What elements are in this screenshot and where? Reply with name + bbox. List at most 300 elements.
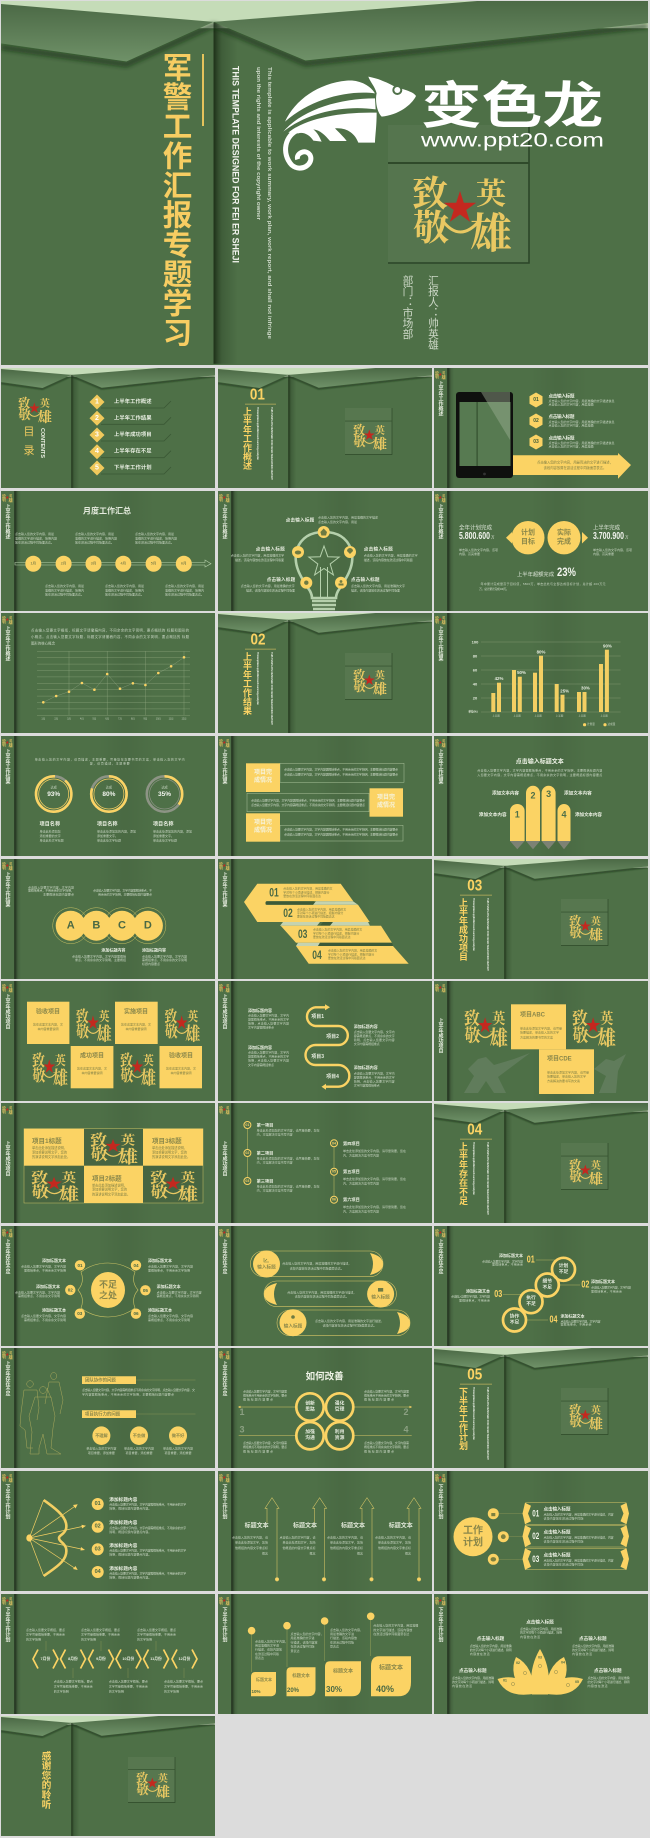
bar 10 percent: 标题文本	[256, 1676, 272, 1682]
ring labels: 协作	[510, 1312, 519, 1320]
project 4: 单击此处添加您的文字内容，请尽量简要，您在	[343, 1148, 406, 1153]
section number: 05	[467, 1366, 482, 1384]
reason 1: 单击输入您的文字内容	[86, 1446, 116, 1451]
plan figure: 5.800.600	[459, 531, 490, 542]
panel: shortcomings	[1, 1226, 215, 1346]
bar 20 percent: 用最准确的文字进	[290, 1635, 315, 1640]
labels left: 需概括重点，不用余余文字简明	[24, 1317, 66, 1322]
item 4: 04	[95, 1569, 102, 1575]
project 3: 内，方案解决方案书写内容	[257, 1188, 293, 1193]
panel: project ABC CDE	[434, 981, 648, 1101]
intro	[477, 767, 602, 777]
card: project ABC: 简要描述，单击输入您的文字	[520, 1030, 559, 1035]
divider 2-3	[280, 922, 370, 926]
logo card	[345, 653, 392, 700]
notes: 点击输入您要文字内容，文字内容需	[364, 1388, 409, 1393]
badge: 敬	[18, 405, 31, 423]
bar values: 50%	[517, 670, 526, 675]
actual figure: 3.700.900	[593, 531, 624, 542]
sidebar title: 上半年工作概述	[4, 503, 10, 540]
panel: completion boxes	[218, 736, 432, 856]
badge 3: 致	[32, 1048, 45, 1071]
note 4: 单击此处添加文字，您简	[378, 1540, 411, 1545]
sidebar badge: 致	[219, 861, 223, 867]
card: project ABC	[511, 1004, 566, 1049]
sidebar badge: 英	[9, 1228, 13, 1233]
intro text	[31, 628, 190, 646]
sidebar badge: 敬	[435, 742, 439, 748]
label left: 点击输入标题	[477, 1635, 505, 1642]
labels right: 点击输入您要文字内容，文字内容	[148, 1263, 193, 1268]
folded collar header	[1, 1716, 215, 1836]
labels right: 需概括重点，不用余余文字简明	[157, 1293, 199, 1298]
plan figure: 内容，高亮重要	[459, 551, 480, 556]
banner numbers: 01	[269, 886, 279, 900]
card: project 2: 的演讲说明文字添加此处。	[92, 1191, 130, 1196]
badge left	[464, 1005, 508, 1052]
label far left: 点击输入您的文字内容，用最准确	[452, 1675, 494, 1680]
upper notes: 准确的文字进行描述，简明内容	[75, 535, 117, 540]
sidebar title: 上半年成功项目	[4, 1140, 10, 1177]
sidebar badge: 雄	[8, 1600, 13, 1607]
sidebar badge	[219, 983, 230, 994]
upper notes: 点击输入您的文字内容，用最	[75, 531, 114, 536]
badge: 致	[18, 394, 31, 412]
upper notes: 点击输入您要文字内容，文字内容需概括重点，不	[93, 888, 152, 893]
pencil 3: 3	[546, 789, 551, 799]
note 2: 点击输入您要文字内容，文字内容	[591, 1285, 631, 1290]
badge bottom right	[150, 1166, 198, 1206]
actual badge	[548, 521, 588, 554]
badge bottom right: 英	[181, 1168, 196, 1186]
step labels: 项目4	[326, 1074, 339, 1080]
soldier silhouettes	[464, 1053, 626, 1093]
sidebar badge	[219, 1228, 230, 1239]
card: project 1: 单击此处添加描述说明，	[32, 1145, 67, 1150]
panel: section 04	[434, 1103, 648, 1223]
sidebar badge: 雄	[8, 1477, 13, 1484]
badge: 英	[375, 667, 385, 682]
list item 3: 上半年成功项目	[114, 430, 152, 438]
project 5: 单击此处添加您的文字内容，请尽量简要，您在	[343, 1176, 406, 1181]
hexagon 03: 03	[533, 439, 539, 445]
item 3: 添加标题内容	[109, 1542, 138, 1549]
reporter: 汇报人：帅英雄	[427, 274, 439, 351]
sidebar badge: 敬	[435, 1477, 439, 1483]
sidebar badge	[219, 1473, 230, 1484]
panel: section 01	[218, 368, 432, 488]
list item 3: 3	[95, 432, 99, 438]
sidebar badge: 英	[9, 983, 13, 988]
note 4: 点击输入您要文字内容，文字内容	[560, 1318, 600, 1323]
sidebar badge	[435, 493, 446, 504]
labels left: 需概括重点，不用余余文字简明	[18, 1293, 60, 1298]
intro text	[35, 756, 185, 766]
english description	[255, 67, 272, 339]
ring 80 percent	[91, 776, 127, 812]
banner 01: 点击输入您的文字内容，用最准确的文字进行描述，内容	[544, 1512, 614, 1516]
lower notes: 的文字简明	[109, 1688, 124, 1693]
banner notes: 点击输入您的文字内容，用最准确的文	[283, 886, 333, 891]
ring 35 percent	[147, 776, 182, 812]
step numbers: 02	[581, 1280, 590, 1290]
list item 5	[90, 460, 171, 476]
sidebar badge	[435, 615, 446, 626]
card: acceptance project 2: 验收项目	[169, 1052, 193, 1060]
note right: 点击输入您要文字内容，文字内容	[142, 954, 187, 959]
sidebar badge	[2, 1596, 13, 1607]
heading: contents english: CONTENTS	[39, 428, 45, 458]
label top: 点击输入您的文字内容，用最	[318, 519, 357, 524]
step numbers	[494, 1254, 590, 1326]
petal marks: 02	[516, 1661, 520, 1665]
upper notes	[15, 531, 177, 545]
badge: 敬	[569, 923, 582, 941]
actual badge: 实际	[557, 528, 571, 536]
project name 3	[153, 820, 192, 843]
sidebar badge: 敬	[219, 1232, 223, 1238]
numerals: 3	[239, 1425, 245, 1435]
notes: 概括重点不用余余的文字简明，要点	[243, 1444, 287, 1449]
reason 2: 项目重要，添加重要	[125, 1450, 153, 1455]
section description	[472, 1387, 490, 1460]
number nodes: 03	[77, 1311, 83, 1316]
bar 30 percent: 在激活过程中同版	[330, 1639, 354, 1644]
lower notes: 放在激活过程中同版面表达。	[105, 592, 144, 597]
sidebar badge: 敬	[2, 1232, 6, 1238]
sidebar title: 上半年存在不足	[4, 1360, 10, 1397]
sidebar badge	[2, 1228, 13, 1239]
bar 10 percent: 意表达	[255, 1655, 264, 1660]
left note bottom: 容需概括重点，不用余余的文字	[248, 1054, 289, 1059]
badge 2: 英	[187, 1007, 198, 1025]
left note top: 添加标题内容	[248, 1007, 272, 1013]
labels left	[15, 1257, 66, 1322]
sidebar badge: 致	[435, 1228, 439, 1234]
project 5	[330, 1168, 406, 1185]
badge bottom right: 致	[150, 1166, 167, 1188]
label far right: 的文字对每个小项进行描述，简明	[588, 1679, 630, 1684]
list item 2: 2	[95, 415, 99, 422]
sidebar badge: 敬	[219, 742, 223, 748]
left note top: 简明，点击输入您要文字内容	[248, 1020, 289, 1025]
reason 3: 做不好	[172, 1432, 185, 1439]
lower notes	[54, 1679, 203, 1693]
ring 35 percent: 35%	[158, 791, 171, 798]
ring labels: 计划	[559, 1262, 568, 1269]
petal marks: 01	[503, 1679, 507, 1683]
ring labels: 不足	[510, 1320, 519, 1326]
sidebar title: 上半年成功项目	[438, 1017, 444, 1054]
badge bottom right: 敬	[150, 1180, 168, 1201]
sidebar badge: 雄	[225, 1232, 230, 1239]
sidebar badge: 致	[219, 1473, 223, 1479]
icons on bulb	[292, 526, 356, 589]
card: successful project	[71, 1046, 113, 1088]
badge: salute heroes: 雄	[470, 201, 512, 261]
sidebar title: 上半年工作结果	[222, 871, 228, 908]
lower notes: 文字尽量概括重要，不用余余	[164, 1683, 203, 1688]
heading: contents	[24, 426, 34, 457]
card: project 2: 单击此处添加描述说明，	[92, 1182, 127, 1187]
circles: A	[67, 920, 75, 932]
sidebar badge: 英	[9, 493, 13, 498]
line chart: 9月	[144, 716, 147, 720]
closing title: 感谢您的聆听	[40, 1750, 51, 1810]
note 4	[375, 1535, 411, 1556]
sidebar badge: 英	[226, 1596, 230, 1601]
sidebar badge: 英	[9, 1350, 13, 1355]
sidebar badge: 雄	[8, 619, 13, 626]
card: project 2: 项目2标题	[92, 1174, 122, 1182]
label top	[286, 514, 378, 524]
right note bottom: 点击输入您要文字内容，文字内	[354, 1070, 395, 1075]
ring labels: 思路	[305, 1406, 315, 1412]
titles: 标题文本	[341, 1521, 365, 1529]
project 5: 第五项目	[343, 1168, 360, 1175]
notes: 概括标题内容要点	[243, 1397, 273, 1402]
right note bottom: 容需概括重点，不用余余的文字	[354, 1074, 395, 1079]
sidebar badge	[2, 1105, 13, 1116]
arrow 2	[313, 1498, 327, 1581]
ring 93 percent: 93%	[47, 791, 60, 798]
labels right: 添加标题文本	[148, 1257, 172, 1263]
card: project CDE: 项目CDE	[547, 1056, 572, 1063]
rings	[503, 1258, 575, 1332]
note 4: 他概括的内容文字重点标	[378, 1545, 411, 1550]
rule	[460, 894, 492, 896]
pill 1: 该段内容放在激活过程中同版面意表达。	[290, 1265, 344, 1270]
sidebar title: 上半年工作结果	[222, 748, 228, 785]
step labels	[311, 1014, 339, 1080]
note 3: 需概括重点，不用余余	[459, 1298, 490, 1303]
section description: THIS TEMPLATE DESIGNED FOR FEI ER SHEJI WORK REPORT	[486, 1387, 490, 1460]
sidebar badge	[435, 370, 446, 381]
card: project 1	[24, 1129, 84, 1166]
lower notes	[45, 583, 204, 597]
sidebar badge: 雄	[441, 619, 446, 626]
labels right: 点击输入您要文字内容，文字内容	[157, 1289, 202, 1294]
lower notes: 的文字简明	[54, 1688, 69, 1693]
arrow 3	[360, 1498, 374, 1581]
banner notes: 字对每个小项进行描述，把握内容分	[283, 889, 330, 894]
chevrons	[33, 1650, 197, 1668]
card: project ABC: 单击此处添加文字内容，请尽量	[520, 1025, 562, 1030]
circles: B	[92, 920, 100, 932]
badge	[353, 421, 387, 454]
lower notes: 准确的文字进行描述，简明内	[45, 587, 84, 592]
lower notes: 点击输入您要文字概括，要点	[164, 1679, 203, 1684]
labels left: 添加标题文本	[42, 1257, 66, 1263]
sidebar title: 下半年工作计划	[222, 1607, 228, 1642]
reason 2	[124, 1426, 154, 1455]
card: successful project: 成功项目	[80, 1052, 104, 1060]
row 3: 项目完	[254, 818, 272, 826]
note 2: 他概括的内容文字重点标	[282, 1545, 316, 1550]
label lower left: 描述，该段内容放在激活过程中同版面	[246, 588, 295, 593]
bar 20 percent: 行描述，该段内容放	[290, 1639, 318, 1644]
heading: contents: 录	[24, 444, 34, 457]
badge right: 英	[600, 1007, 613, 1028]
card: project 1: 项目1标题	[32, 1136, 62, 1145]
sidebar badge: 雄	[225, 1354, 230, 1361]
month labels: 8月份	[68, 1656, 78, 1661]
project 6: 06	[332, 1198, 336, 1202]
upper notes: 用余余的文字简明，主要概括标题内容要点	[98, 891, 152, 896]
issue bar 1: 团队协作的问题	[85, 1376, 116, 1384]
badge right: 致	[572, 1005, 588, 1030]
banner notes: 点击输入您的文字内容，用最准确的文	[313, 927, 362, 932]
badge right: 雄	[598, 1021, 616, 1052]
sidebar badge: 敬	[2, 1477, 6, 1483]
panel: ABCD circles	[1, 859, 215, 979]
left note bottom: 文字内容需概括重点	[248, 1062, 274, 1067]
intro text: 容，该页描述，主题重要	[90, 761, 130, 766]
sidebar badge: 敬	[435, 497, 439, 503]
badge: 雄	[373, 434, 387, 454]
hexagon 01	[530, 392, 615, 408]
label left: 点击输入您的文字内容，用最准确	[470, 1643, 512, 1648]
item 4: 添加标题内容	[109, 1565, 138, 1572]
badge top middle: 英	[121, 1130, 136, 1148]
sidebar badge	[219, 1596, 230, 1607]
sidebar badge: 敬	[219, 1477, 223, 1483]
card: implementation project	[115, 1002, 158, 1044]
badge: 敬	[353, 677, 366, 695]
project 5: 内，方案解决方案书写内容	[343, 1180, 379, 1185]
banner notes: 要放在激活过程中同版面表达	[283, 893, 321, 898]
left note top: 点击输入您要文字内容，文字内	[248, 1013, 289, 1018]
bar 10 percent: 点击输入您的文字内容，	[255, 1638, 288, 1643]
upper notes	[26, 1627, 176, 1641]
note: 年中累计完成量高于目标值，5800万，单击此处与全部达成目标计划，总计超 400万元	[480, 581, 606, 586]
numerals: 4	[403, 1425, 409, 1435]
right note top: 简明，点击输入您要文字内容	[354, 1037, 395, 1042]
list item 1: 1	[95, 398, 99, 406]
hexagon 02	[530, 413, 615, 428]
sidebar badge	[435, 1473, 446, 1484]
people outline	[20, 1372, 63, 1454]
row 2	[247, 788, 403, 817]
panel: up arrows	[218, 1471, 432, 1591]
sidebar badge: 敬	[2, 742, 6, 748]
note right: 标题内容要点	[142, 961, 160, 966]
label left: 点击输入标题	[256, 546, 285, 552]
label right: 点击输入您的文字内容，用最准确的文字	[364, 552, 418, 557]
pencil 4: 4	[561, 809, 567, 819]
panel: progress rings	[1, 736, 215, 856]
sidebar badge: 英	[9, 861, 13, 866]
label lower right: 点击输入您的文字内容，用最准确的文字	[351, 583, 405, 588]
badge 2	[164, 1004, 201, 1046]
upper notes: 准确的文字进行描述，简明内容	[135, 535, 177, 540]
label far left: 的文字对每个小项进行描述，简明	[452, 1679, 494, 1684]
badge: 敬	[569, 1412, 582, 1430]
row 3: 成情况	[254, 826, 272, 834]
badge 4: 敬	[120, 1063, 134, 1086]
bar 30 percent: 点击输入您的文字内容，	[330, 1627, 363, 1632]
center badge: 之处	[99, 1290, 117, 1300]
item 3	[92, 1542, 186, 1557]
project name 3: 单击此处文字标题	[153, 838, 177, 843]
bar 20 percent: 标题文本	[292, 1672, 310, 1679]
banner 03: 点击输入您的文字内容，用最准确的文字进行描述，内容	[544, 1558, 614, 1562]
hexagon 03: 点击输入您的文字内容，用最准确的文字描述信息	[548, 440, 615, 445]
x axis labels: 上半期	[556, 714, 564, 718]
number nodes: 01	[77, 1263, 83, 1268]
left note top: 文字内容需概括重点	[248, 1024, 274, 1029]
hexagon 02: 点击输入您的文字内容，用最准确	[548, 423, 594, 428]
ring labels: 不足	[526, 1301, 536, 1307]
badge bottom left: 英	[62, 1168, 77, 1186]
sidebar badge: 致	[2, 615, 6, 621]
sidebar badge: 致	[435, 370, 439, 376]
intro text: 小概念。点击输入您要文字标题，标题文字请撤稿内容，不同余余的文字简明，要点概括的 标题	[31, 634, 190, 639]
numerals: 1	[239, 1407, 245, 1417]
section description	[472, 898, 490, 971]
section description	[256, 407, 274, 480]
heading: 月度工作汇总	[83, 506, 131, 516]
pencil 2	[526, 786, 540, 849]
divider 3-4	[296, 943, 393, 946]
sidebar badge: 敬	[435, 619, 439, 625]
badge 3: 英	[55, 1051, 66, 1069]
row 2: 成情况	[377, 801, 395, 809]
english heading: THIS TEMPLATE DESIGNED FOR FEI ER SHEJI	[230, 66, 240, 263]
titles: 标题文本	[245, 1521, 269, 1529]
section title: 上半年工作概述	[242, 406, 252, 471]
sidebar badge	[219, 493, 230, 504]
y axis labels: 60	[473, 668, 478, 672]
step numbers: 01	[527, 1254, 535, 1266]
panel: section 05	[434, 1348, 648, 1468]
issue bar 1: 点击输入您要文字内容，文字内容需概括重点不用余余的文字简明，点击输入您要文字内容，文	[82, 1387, 195, 1392]
badge 1: 英	[99, 1007, 110, 1025]
month nodes: 4月	[121, 561, 127, 566]
label right: 点击输入标题	[364, 546, 393, 552]
pencil 4	[558, 804, 570, 849]
sidebar badge	[435, 983, 446, 994]
sidebar badge: 雄	[225, 742, 230, 749]
item 1: 01	[95, 1501, 101, 1507]
sidebar badge: 致	[2, 493, 6, 499]
bar 10 percent	[248, 1620, 371, 1696]
bar 20 percent: 意表达	[290, 1648, 300, 1653]
bar 40 percent: 的文字进行描述，该段内容放	[373, 1627, 412, 1632]
department: 部门：市场部	[402, 274, 414, 340]
panel: team silhouettes	[1, 1348, 215, 1468]
note 4: 需概括重点，不用余余	[560, 1322, 592, 1327]
project 6: 单击此处添加您的文字内容，请尽量简要，您在	[343, 1204, 406, 1209]
badge right	[572, 1005, 616, 1052]
card: acceptance project 2	[160, 1046, 202, 1088]
row 1: 项目完	[254, 768, 272, 776]
actual figure: 上半年完成	[593, 523, 620, 531]
badge top middle: 雄	[118, 1143, 138, 1169]
project 1: 单击此处添加您的文字内容，请尽量简要，您在	[257, 1127, 320, 1132]
project 4	[330, 1140, 406, 1157]
bar 10 percent: 10%	[252, 1689, 261, 1694]
intro text: 图形的核心概念	[31, 641, 56, 646]
badge 4: 雄	[141, 1064, 156, 1090]
lower notes: 点击输入您的文字内容，用最	[165, 583, 204, 588]
sidebar badge: 致	[435, 738, 439, 744]
note 3	[327, 1535, 363, 1556]
intro: 入您要文字内容，文字内容需概括重点，不用余余的文字简明，主要概括标题内容要点	[477, 772, 602, 777]
label right: 描述，该段内容放在激活过程中同版面	[364, 557, 413, 562]
labels right	[148, 1257, 202, 1322]
ring labels	[510, 1262, 568, 1326]
